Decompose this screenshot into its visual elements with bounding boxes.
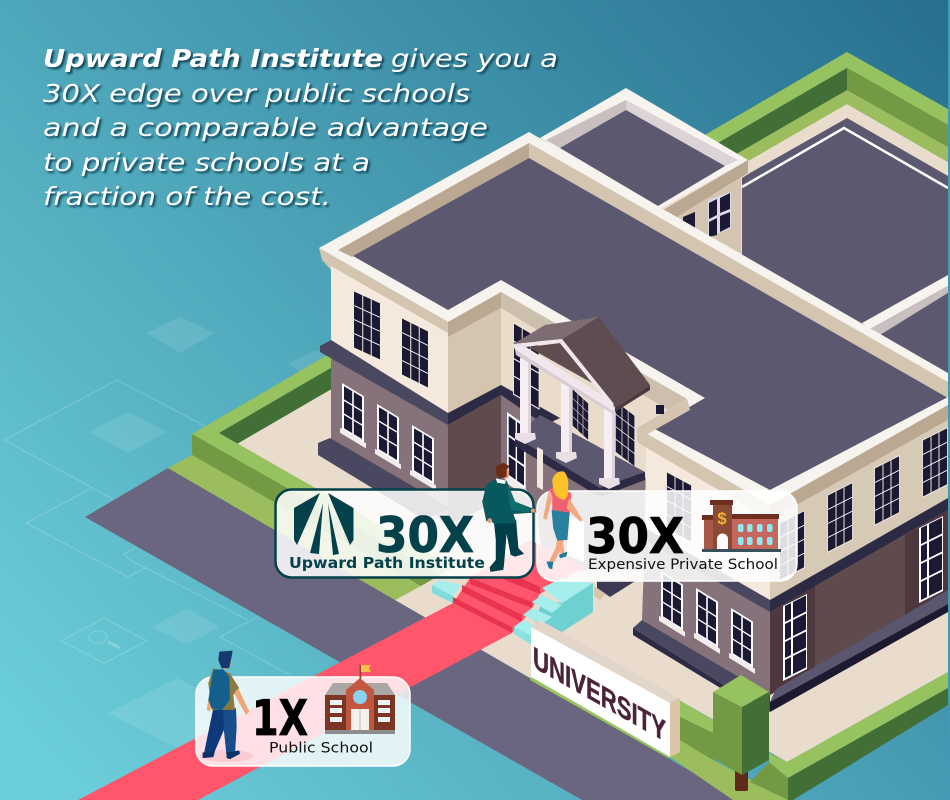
left wing windows bbox=[340, 290, 664, 498]
rear block with small roof bbox=[540, 88, 748, 253]
main building: recess walls bbox=[501, 295, 690, 570]
heading: gives you a bbox=[391, 44, 558, 73]
teal stairs left bbox=[432, 580, 462, 596]
portico bbox=[513, 317, 650, 570]
card: public school: Public School bbox=[269, 740, 373, 756]
column bbox=[556, 382, 577, 463]
right wing windows bbox=[659, 427, 948, 681]
entrance landing and stairs bbox=[432, 540, 637, 645]
image edge strips bbox=[948, 0, 950, 800]
column bbox=[599, 406, 620, 489]
main roof bbox=[319, 132, 948, 505]
entrance door bbox=[567, 515, 584, 562]
courtyard ground bbox=[237, 104, 948, 762]
card: expensive private school: 30X bbox=[586, 508, 684, 565]
card: expensive private school: Expensive Private School bbox=[588, 557, 778, 573]
university sign bbox=[530, 620, 680, 758]
card: upward path institute: Upward Path Institute bbox=[289, 554, 485, 572]
column bbox=[515, 358, 536, 444]
icon: private school building: $ bbox=[717, 509, 727, 528]
figure: woman bbox=[543, 471, 583, 569]
card: public school bbox=[196, 665, 410, 766]
hedge: back and left run bbox=[192, 52, 948, 444]
figure: man in suit bbox=[482, 463, 535, 572]
red carpet bbox=[78, 603, 512, 800]
rear roof wing bbox=[742, 118, 948, 400]
icon: private school building bbox=[702, 500, 781, 552]
icon: public school building bbox=[325, 665, 395, 734]
road bbox=[85, 468, 740, 800]
right wing walls bbox=[633, 405, 948, 712]
faint background pattern bbox=[4, 317, 330, 748]
sign text: UNIVERSITY bbox=[533, 640, 666, 749]
left wing walls bbox=[318, 248, 560, 525]
heading: fraction of the cost. bbox=[43, 182, 331, 211]
heading: to private schools at a bbox=[43, 148, 370, 177]
heading: 30X edge over public schools bbox=[43, 79, 470, 108]
hedge: bottom right bbox=[670, 672, 948, 800]
hedge: light strip behind the building bbox=[700, 90, 948, 175]
heading: Upward Path Institute bbox=[43, 44, 383, 73]
logo bbox=[294, 493, 354, 555]
rear windows bbox=[683, 192, 731, 238]
teal stairs right bbox=[514, 578, 593, 645]
figure: student with backpack bbox=[200, 651, 253, 762]
card: public school: 1X bbox=[252, 690, 308, 747]
card: expensive private school bbox=[537, 491, 797, 581]
card: upward path institute bbox=[276, 490, 534, 578]
card: upward path institute: 30X bbox=[376, 507, 474, 564]
pediment roof bbox=[513, 317, 650, 414]
red stairs bbox=[453, 573, 540, 633]
heading bbox=[43, 44, 558, 211]
hedge: front run bbox=[168, 433, 454, 600]
tree bbox=[713, 675, 769, 791]
heading: and a comparable advantage bbox=[43, 113, 488, 142]
